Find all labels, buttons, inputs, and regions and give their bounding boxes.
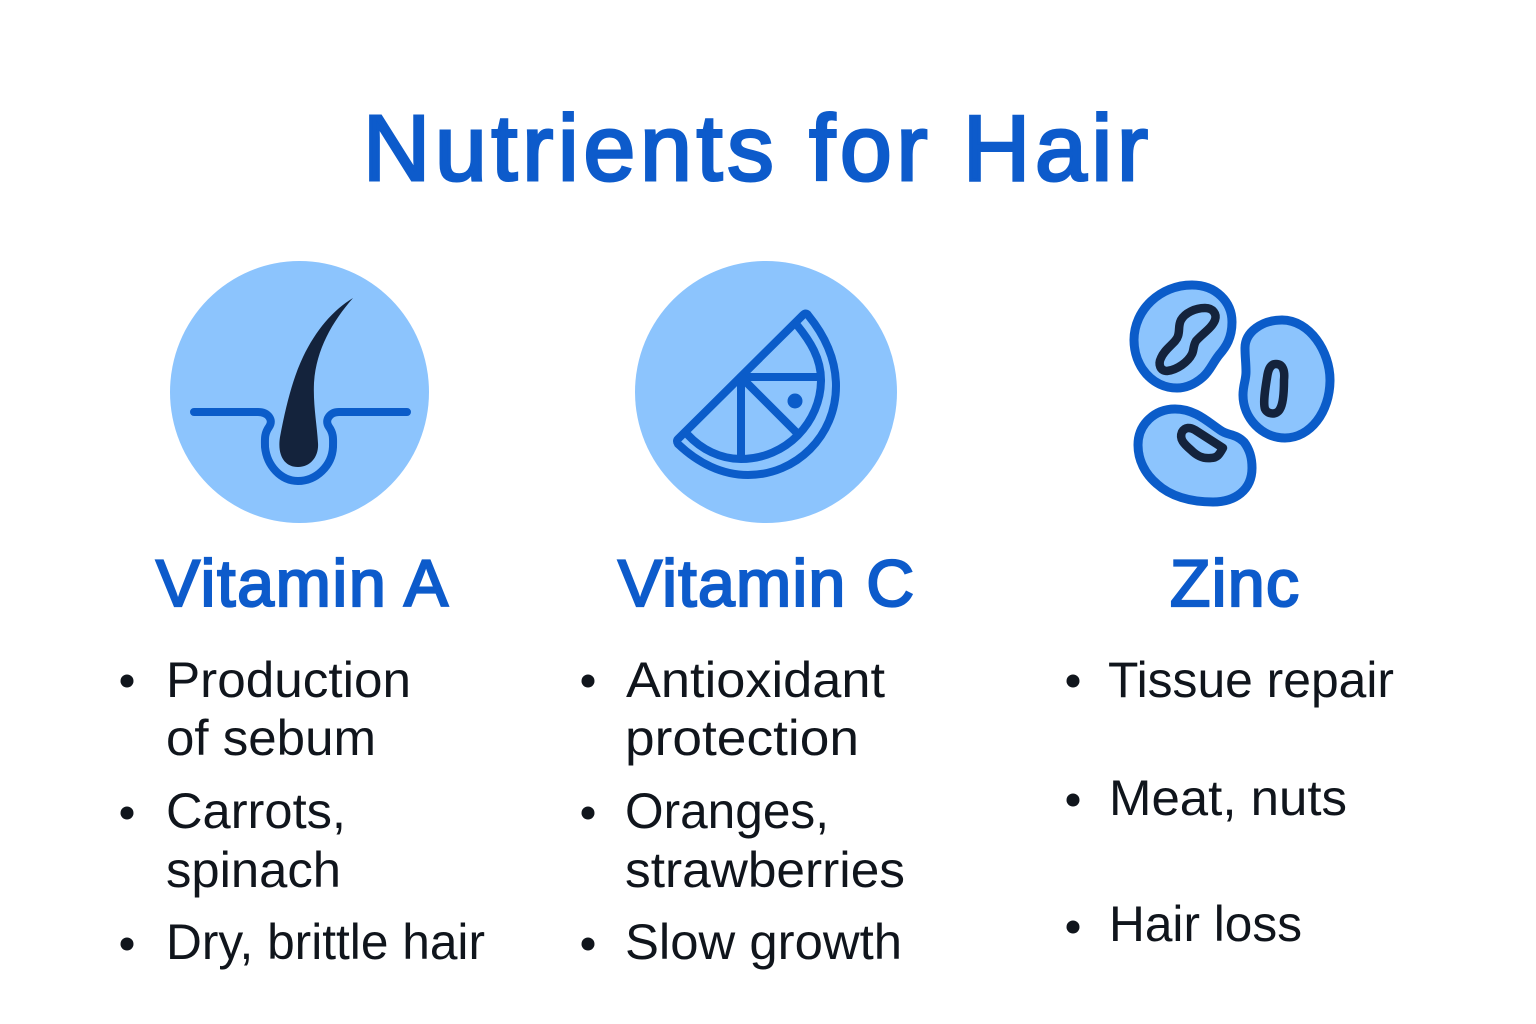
list: Vitamin C facts: strawberries bbox=[625, 842, 905, 898]
icon: three beans bbox=[1134, 285, 1330, 502]
list: Zinc facts: Tissue repair bbox=[1108, 652, 1394, 708]
list: Vitamin C facts bbox=[582, 652, 905, 970]
icon: hair follicle bbox=[170, 261, 429, 523]
list: Vitamin C facts: protection bbox=[625, 710, 859, 766]
icon: citrus slice bbox=[635, 261, 897, 523]
list: Vitamin A facts: Production bbox=[166, 652, 411, 708]
heading: Vitamin C: Vitamin C bbox=[618, 546, 914, 620]
list: Vitamin A facts: of sebum bbox=[166, 710, 376, 766]
panel: Vitamin C bbox=[582, 261, 914, 970]
list: Zinc facts: Meat, nuts bbox=[1109, 770, 1347, 826]
list: Vitamin A facts bbox=[120, 652, 485, 970]
panel: Zinc bbox=[1066, 285, 1394, 952]
heading: Vitamin A: Vitamin A bbox=[156, 546, 448, 620]
heading: Zinc: Zinc bbox=[1170, 546, 1299, 620]
title: Nutrients for Hair bbox=[363, 96, 1148, 200]
list: Zinc facts bbox=[1066, 652, 1394, 952]
list: Vitamin C facts: Antioxidant bbox=[626, 652, 885, 708]
list: Vitamin A facts: Carrots, bbox=[166, 783, 346, 839]
list: Vitamin C facts: Oranges, bbox=[625, 783, 829, 839]
panel: Vitamin A bbox=[120, 261, 485, 970]
list: Vitamin A facts: spinach bbox=[166, 842, 341, 898]
list: Zinc facts: Hair loss bbox=[1109, 896, 1302, 952]
list: Vitamin C facts: Slow growth bbox=[625, 914, 902, 970]
list: Vitamin A facts: Dry, brittle hair bbox=[166, 914, 485, 970]
